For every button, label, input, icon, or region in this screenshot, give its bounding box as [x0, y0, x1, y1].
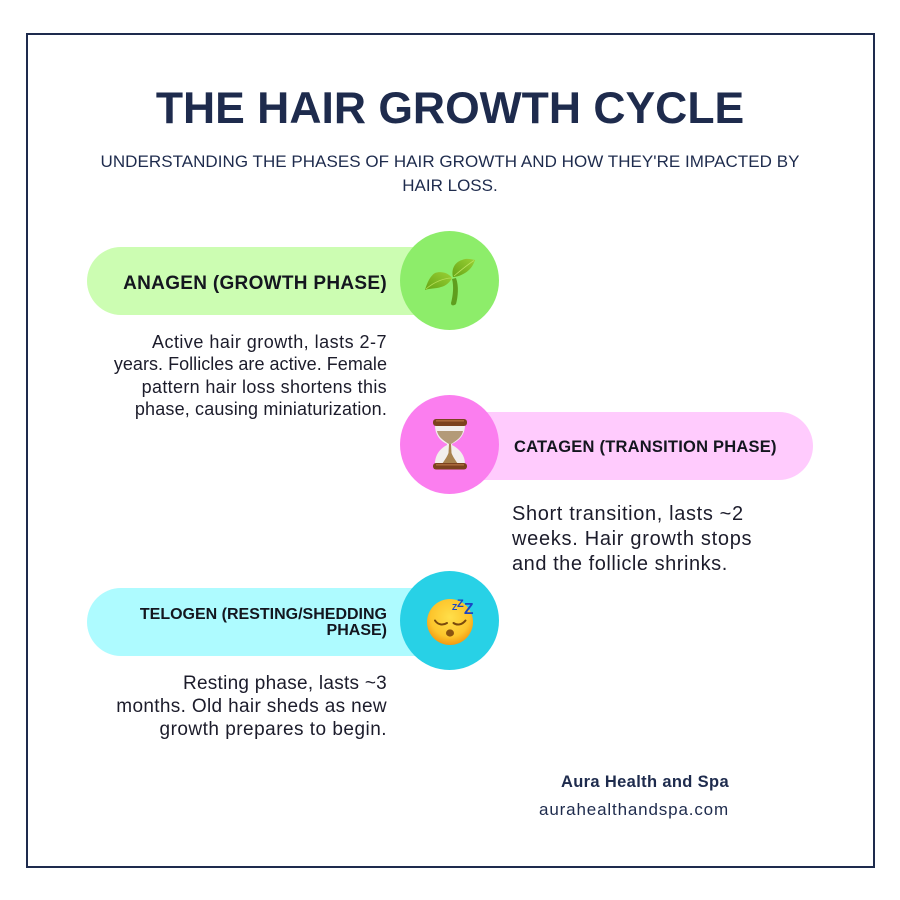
- website: aurahealthandspa.com: [539, 800, 729, 819]
- telogen description: Resting phase, lasts ~3: [183, 673, 387, 694]
- anagen pill: [87, 247, 450, 315]
- catagen heading: CATAGEN (TRANSITION PHASE): [514, 438, 777, 456]
- anagen icon circle: [400, 231, 499, 330]
- subtitle: [101, 152, 799, 195]
- anagen description: pattern hair loss shortens this: [142, 377, 387, 397]
- icon: hourglass: [433, 419, 467, 470]
- anagen description: years. Follicles are active. Female: [114, 354, 387, 374]
- telogen description: [116, 673, 387, 740]
- subtitle: HAIR LOSS.: [402, 176, 498, 195]
- telogen description: growth prepares to begin.: [160, 719, 387, 740]
- icon: sleeping face: Z: [457, 598, 464, 610]
- telogen pill: [87, 588, 450, 656]
- telogen heading: PHASE): [327, 622, 387, 639]
- catagen icon circle: [400, 395, 499, 494]
- icon: sleeping face: [427, 598, 474, 645]
- telogen icon circle: [400, 571, 499, 670]
- panel: catagen: [400, 395, 813, 575]
- catagen pill: [450, 412, 813, 480]
- icon: sleeping face: Z: [452, 602, 457, 612]
- icon: sleeping face: Z: [464, 601, 474, 618]
- anagen description: [114, 332, 387, 419]
- catagen description: Short transition, lasts ~2: [512, 503, 744, 525]
- icon: seedling: [425, 258, 475, 306]
- title: THE HAIR GROWTH CYCLE: [156, 84, 744, 133]
- telogen description: months. Old hair sheds as new: [116, 696, 387, 717]
- panel: telogen: [87, 571, 499, 740]
- anagen description: phase, causing miniaturization.: [135, 399, 387, 419]
- subtitle: UNDERSTANDING THE PHASES OF HAIR GROWTH AND HOW THEY'RE IMPACTED BY: [101, 152, 799, 171]
- brand name: Aura Health and Spa: [561, 773, 729, 791]
- telogen heading: [140, 606, 387, 639]
- telogen heading: TELOGEN (RESTING/SHEDDING: [140, 606, 387, 623]
- catagen description: [512, 503, 752, 575]
- anagen description: Active hair growth, lasts 2-7: [152, 332, 387, 352]
- catagen description: and the follicle shrinks.: [512, 553, 728, 575]
- catagen description: weeks. Hair growth stops: [512, 528, 752, 550]
- footer: brand: [539, 773, 729, 819]
- anagen heading: ANAGEN (GROWTH PHASE): [123, 273, 387, 294]
- panel: anagen: [87, 231, 499, 419]
